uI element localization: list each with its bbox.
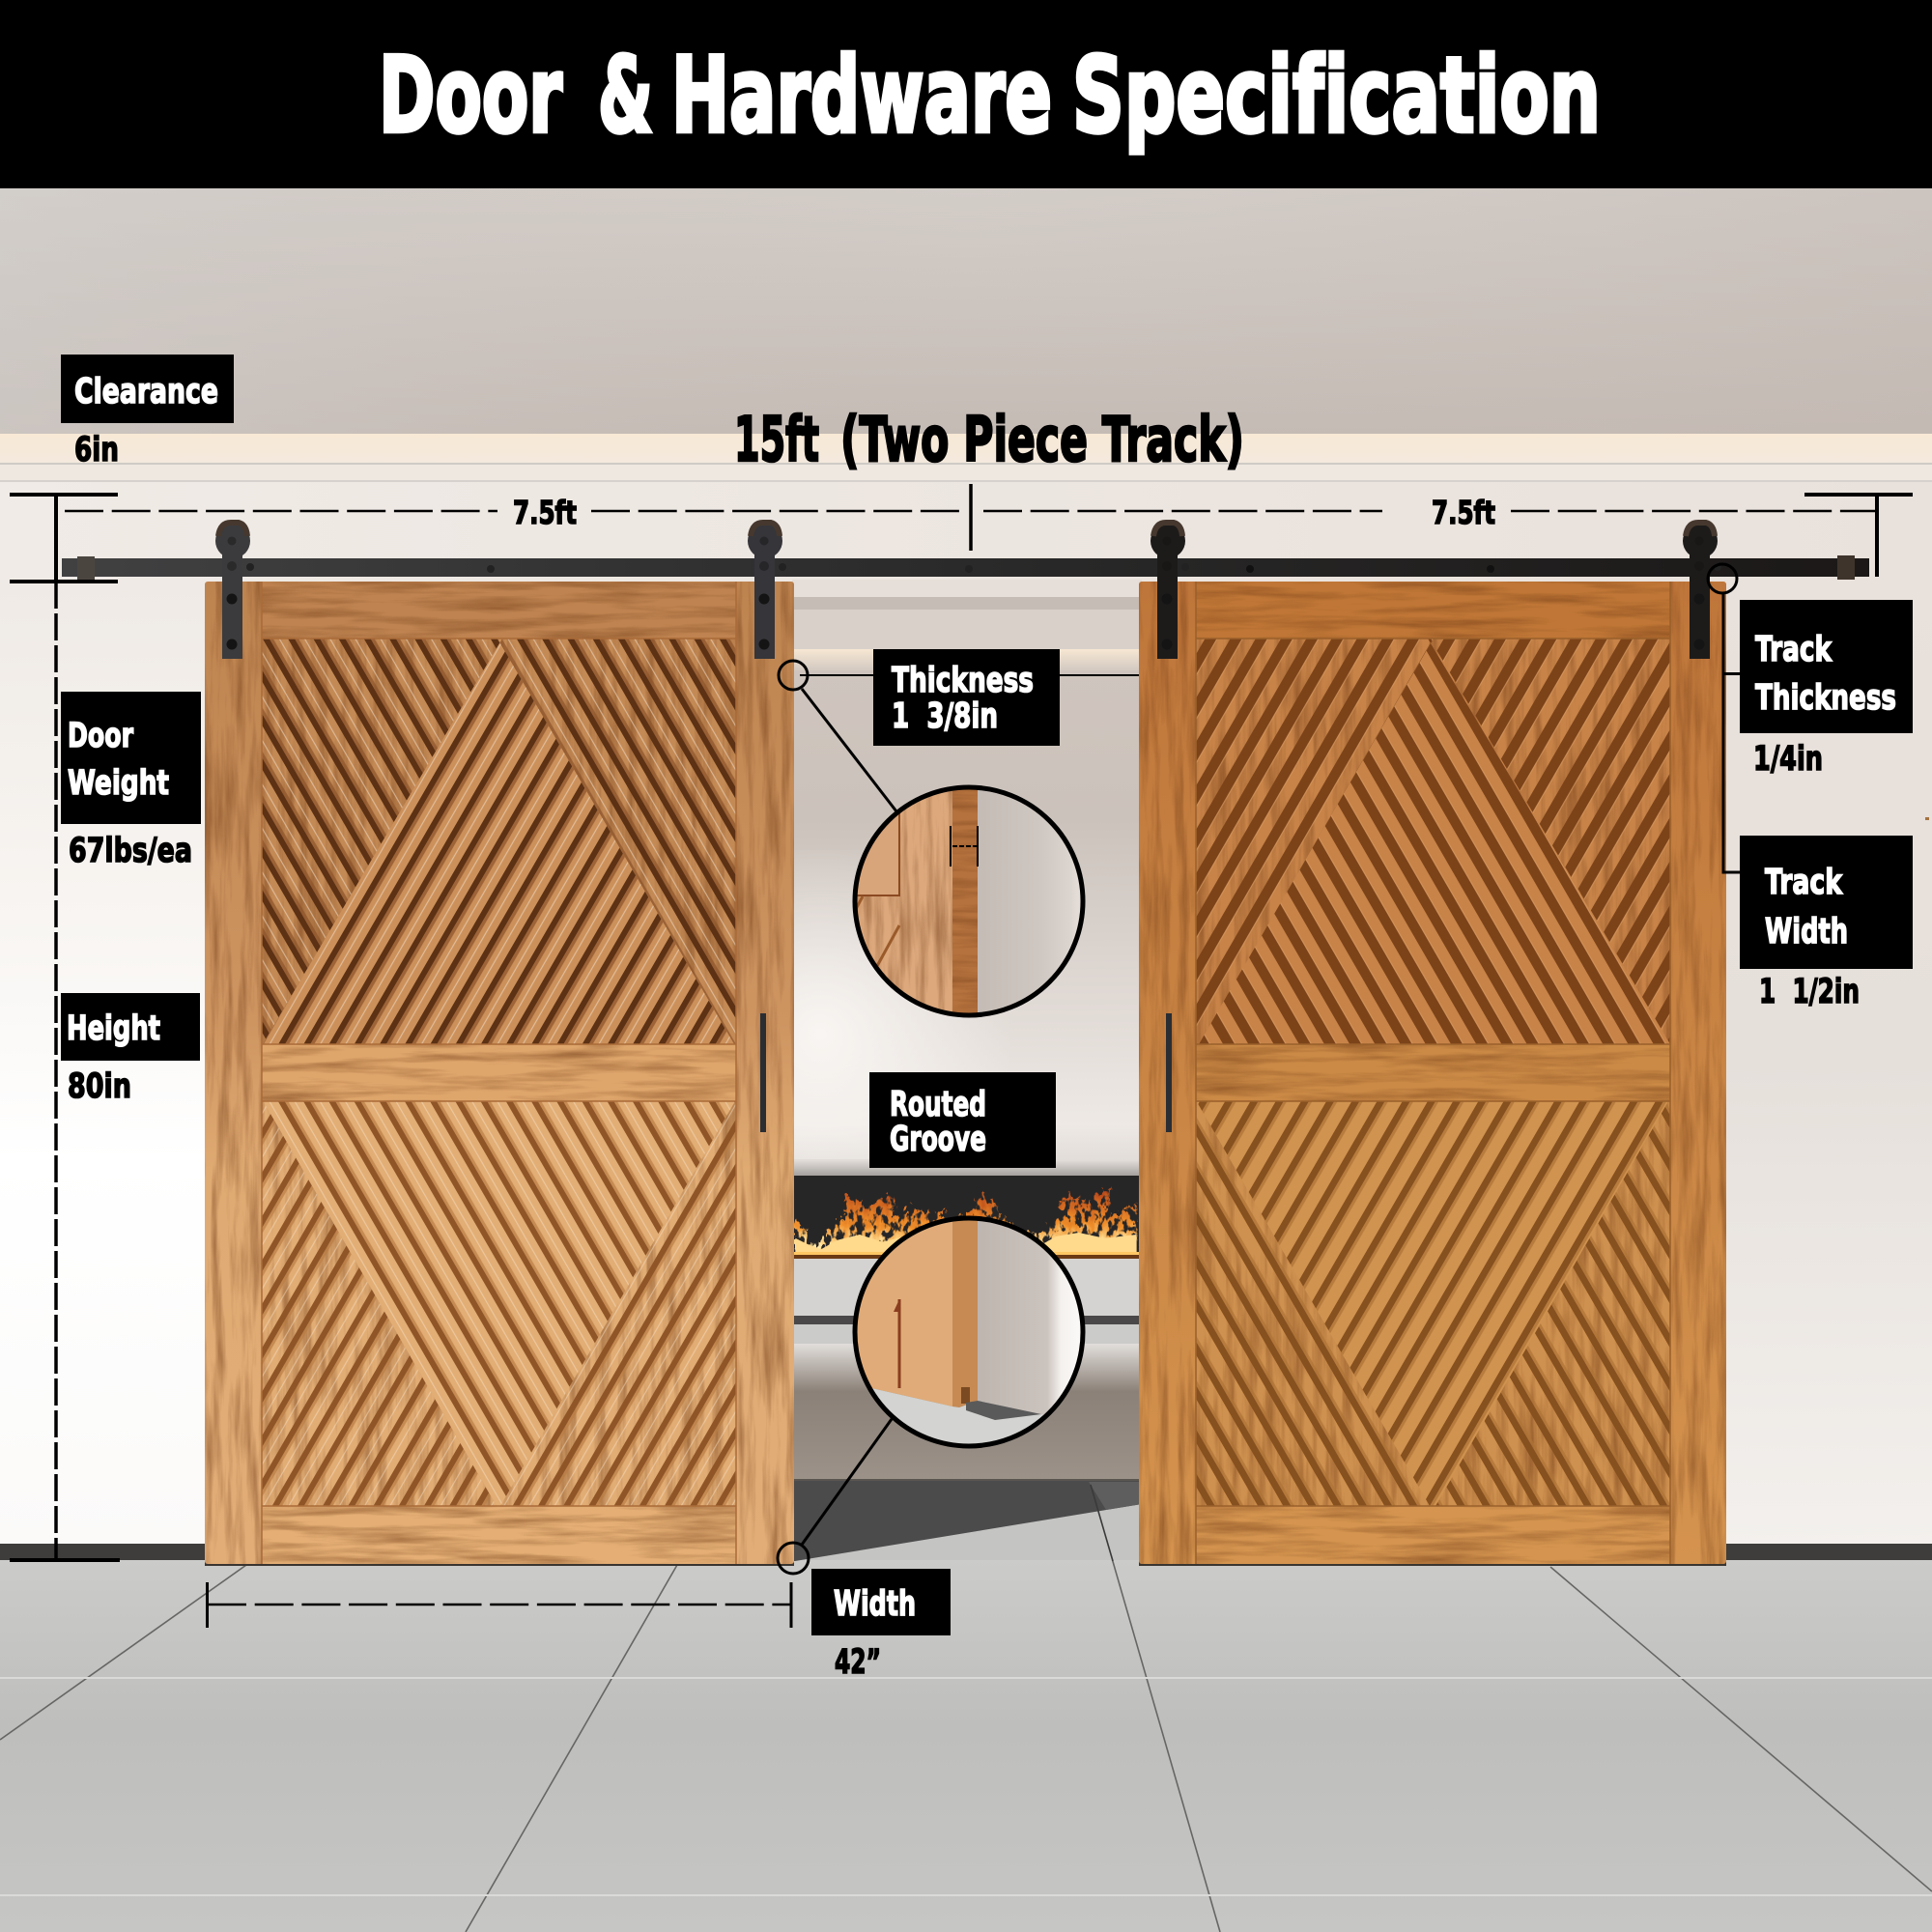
callout: door weight: Weight	[68, 764, 169, 803]
callout: width	[811, 1569, 951, 1682]
bottom rail	[262, 1506, 736, 1564]
callout: clearance: 6in	[74, 431, 119, 469]
callout: clearance	[61, 355, 234, 469]
callout: height: 80in	[68, 1067, 131, 1106]
hanger strap: door 1 right	[748, 523, 786, 659]
upper panel	[262, 639, 736, 1044]
hanger strap: door 1 left	[215, 523, 254, 659]
track length heading	[734, 405, 1244, 476]
height and clearance dimension lines	[10, 495, 120, 1560]
track length heading: 15ft	[734, 405, 819, 476]
detail circle: thickness	[850, 782, 1094, 1024]
stiles	[205, 582, 794, 1564]
label: 7.5ft right: 7.5ft	[1432, 494, 1495, 531]
callout: thickness	[873, 649, 1060, 746]
hanger strap: door 2 left	[1151, 523, 1189, 659]
top rail	[262, 582, 736, 639]
callout: track thickness	[1740, 600, 1913, 779]
door handles	[760, 1013, 1172, 1132]
callout: door weight: 67lbs/ea	[69, 832, 192, 870]
width leader line and marker	[778, 1419, 892, 1574]
title	[379, 36, 1601, 156]
callout: door weight	[61, 692, 201, 870]
callout: track width: Track	[1765, 863, 1843, 902]
callout: routed groove: Groove	[890, 1120, 986, 1159]
callout: width: 42”	[835, 1643, 881, 1682]
header bar	[0, 0, 1932, 188]
door width dimension line	[207, 1582, 791, 1628]
callout: routed groove	[869, 1072, 1056, 1168]
lower panel	[1196, 1101, 1670, 1506]
callout: clearance: Clearance	[74, 372, 218, 412]
floor tile seams	[0, 1485, 1932, 1932]
callout: routed groove: Routed	[890, 1085, 986, 1124]
left barn door	[205, 582, 794, 1566]
sliding track	[62, 555, 1869, 580]
callout: track thickness: Track	[1755, 630, 1833, 669]
callout: track width: Width	[1765, 912, 1848, 952]
track callout leader	[1708, 564, 1740, 872]
callout: thickness: Thickness	[892, 661, 1034, 700]
callout: track thickness: 1/4in	[1753, 740, 1823, 779]
label: 7.5ft left: 7.5ft	[513, 494, 577, 531]
middle rail	[1196, 1044, 1670, 1101]
centre opening background	[792, 580, 1142, 1561]
thickness leader lines	[779, 661, 1139, 811]
lower panel	[262, 1101, 736, 1506]
callout: track width: 1 1/2in	[1759, 973, 1860, 1011]
bottom rail	[1196, 1506, 1670, 1564]
stiles	[1139, 582, 1726, 1564]
track length heading: (Two Piece Track)	[840, 405, 1244, 476]
callout: track width	[1740, 836, 1913, 1011]
right barn door	[1139, 582, 1726, 1566]
callout: thickness: 1 3/8in	[892, 696, 998, 736]
callout: height: Height	[67, 1009, 160, 1048]
upper panel	[1196, 639, 1670, 1044]
title: Hardware	[671, 36, 1052, 156]
callout: height	[61, 993, 200, 1106]
top rail	[1196, 582, 1670, 639]
title: Specification	[1072, 36, 1601, 156]
title: Door	[379, 36, 562, 156]
callout: door weight: Door	[68, 717, 134, 755]
fireplace	[792, 1176, 1142, 1259]
hanger strap: door 2 right	[1683, 523, 1721, 659]
detail circle: routed groove	[852, 1215, 1086, 1449]
callout: width: Width	[834, 1584, 916, 1624]
track width dimension lines	[65, 484, 1913, 577]
title: &	[598, 36, 653, 156]
middle rail	[262, 1044, 736, 1101]
